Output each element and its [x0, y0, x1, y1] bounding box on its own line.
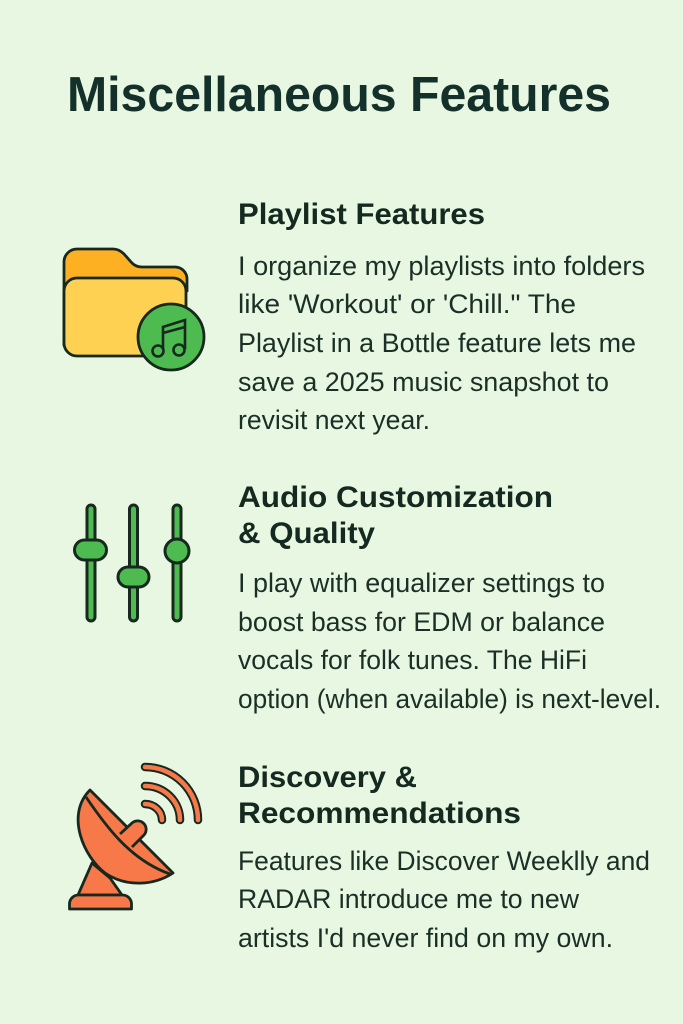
- text: audio description: option (when available) is next-level.: [238, 684, 661, 714]
- icon: folder with music note: [64, 249, 204, 370]
- text: discovery description: Features like Discover Weeklly and: [238, 846, 650, 876]
- text: playlist description: save a 2025 music snapshot to: [238, 367, 609, 397]
- title: Miscellaneous Features: [67, 68, 611, 122]
- text: playlist description: Playlist in a Bottle feature lets me: [238, 328, 636, 358]
- text: playlist description: [238, 251, 645, 435]
- heading: audio customization and quality: Audio Customization: [238, 481, 553, 514]
- panel: playlist features: [64, 198, 645, 435]
- heading: audio customization and quality: & Quality: [238, 517, 375, 550]
- heading: discovery and recommendations: [238, 761, 521, 830]
- heading: discovery and recommendations: Discovery &: [238, 761, 417, 794]
- panel: discovery and recommendations: [70, 761, 650, 953]
- text: discovery description: artists I'd never find on my own.: [238, 923, 613, 953]
- text: audio description: boost bass for EDM or balance: [238, 607, 605, 637]
- text: discovery description: RADAR introduce me to new: [238, 884, 579, 914]
- icon: satellite dish: [70, 767, 198, 909]
- heading: discovery and recommendations: Recommendations: [238, 797, 521, 830]
- text: audio description: vocals for folk tunes. The HiFi: [238, 645, 587, 675]
- icon: equalizer sliders: [74, 505, 189, 621]
- heading: audio customization and quality: [238, 481, 553, 550]
- heading: playlist features: Playlist Features: [238, 198, 485, 231]
- text: playlist description: revisit next year.: [238, 405, 430, 435]
- text: audio description: I play with equalizer settings to: [238, 568, 605, 598]
- text: discovery description: [238, 846, 650, 953]
- text: playlist description: like 'Workout' or 'Chill." The: [238, 289, 576, 319]
- panel: audio customization: [74, 481, 661, 714]
- text: audio description: [238, 568, 661, 714]
- text: playlist description: I organize my playlists into folders: [238, 251, 645, 281]
